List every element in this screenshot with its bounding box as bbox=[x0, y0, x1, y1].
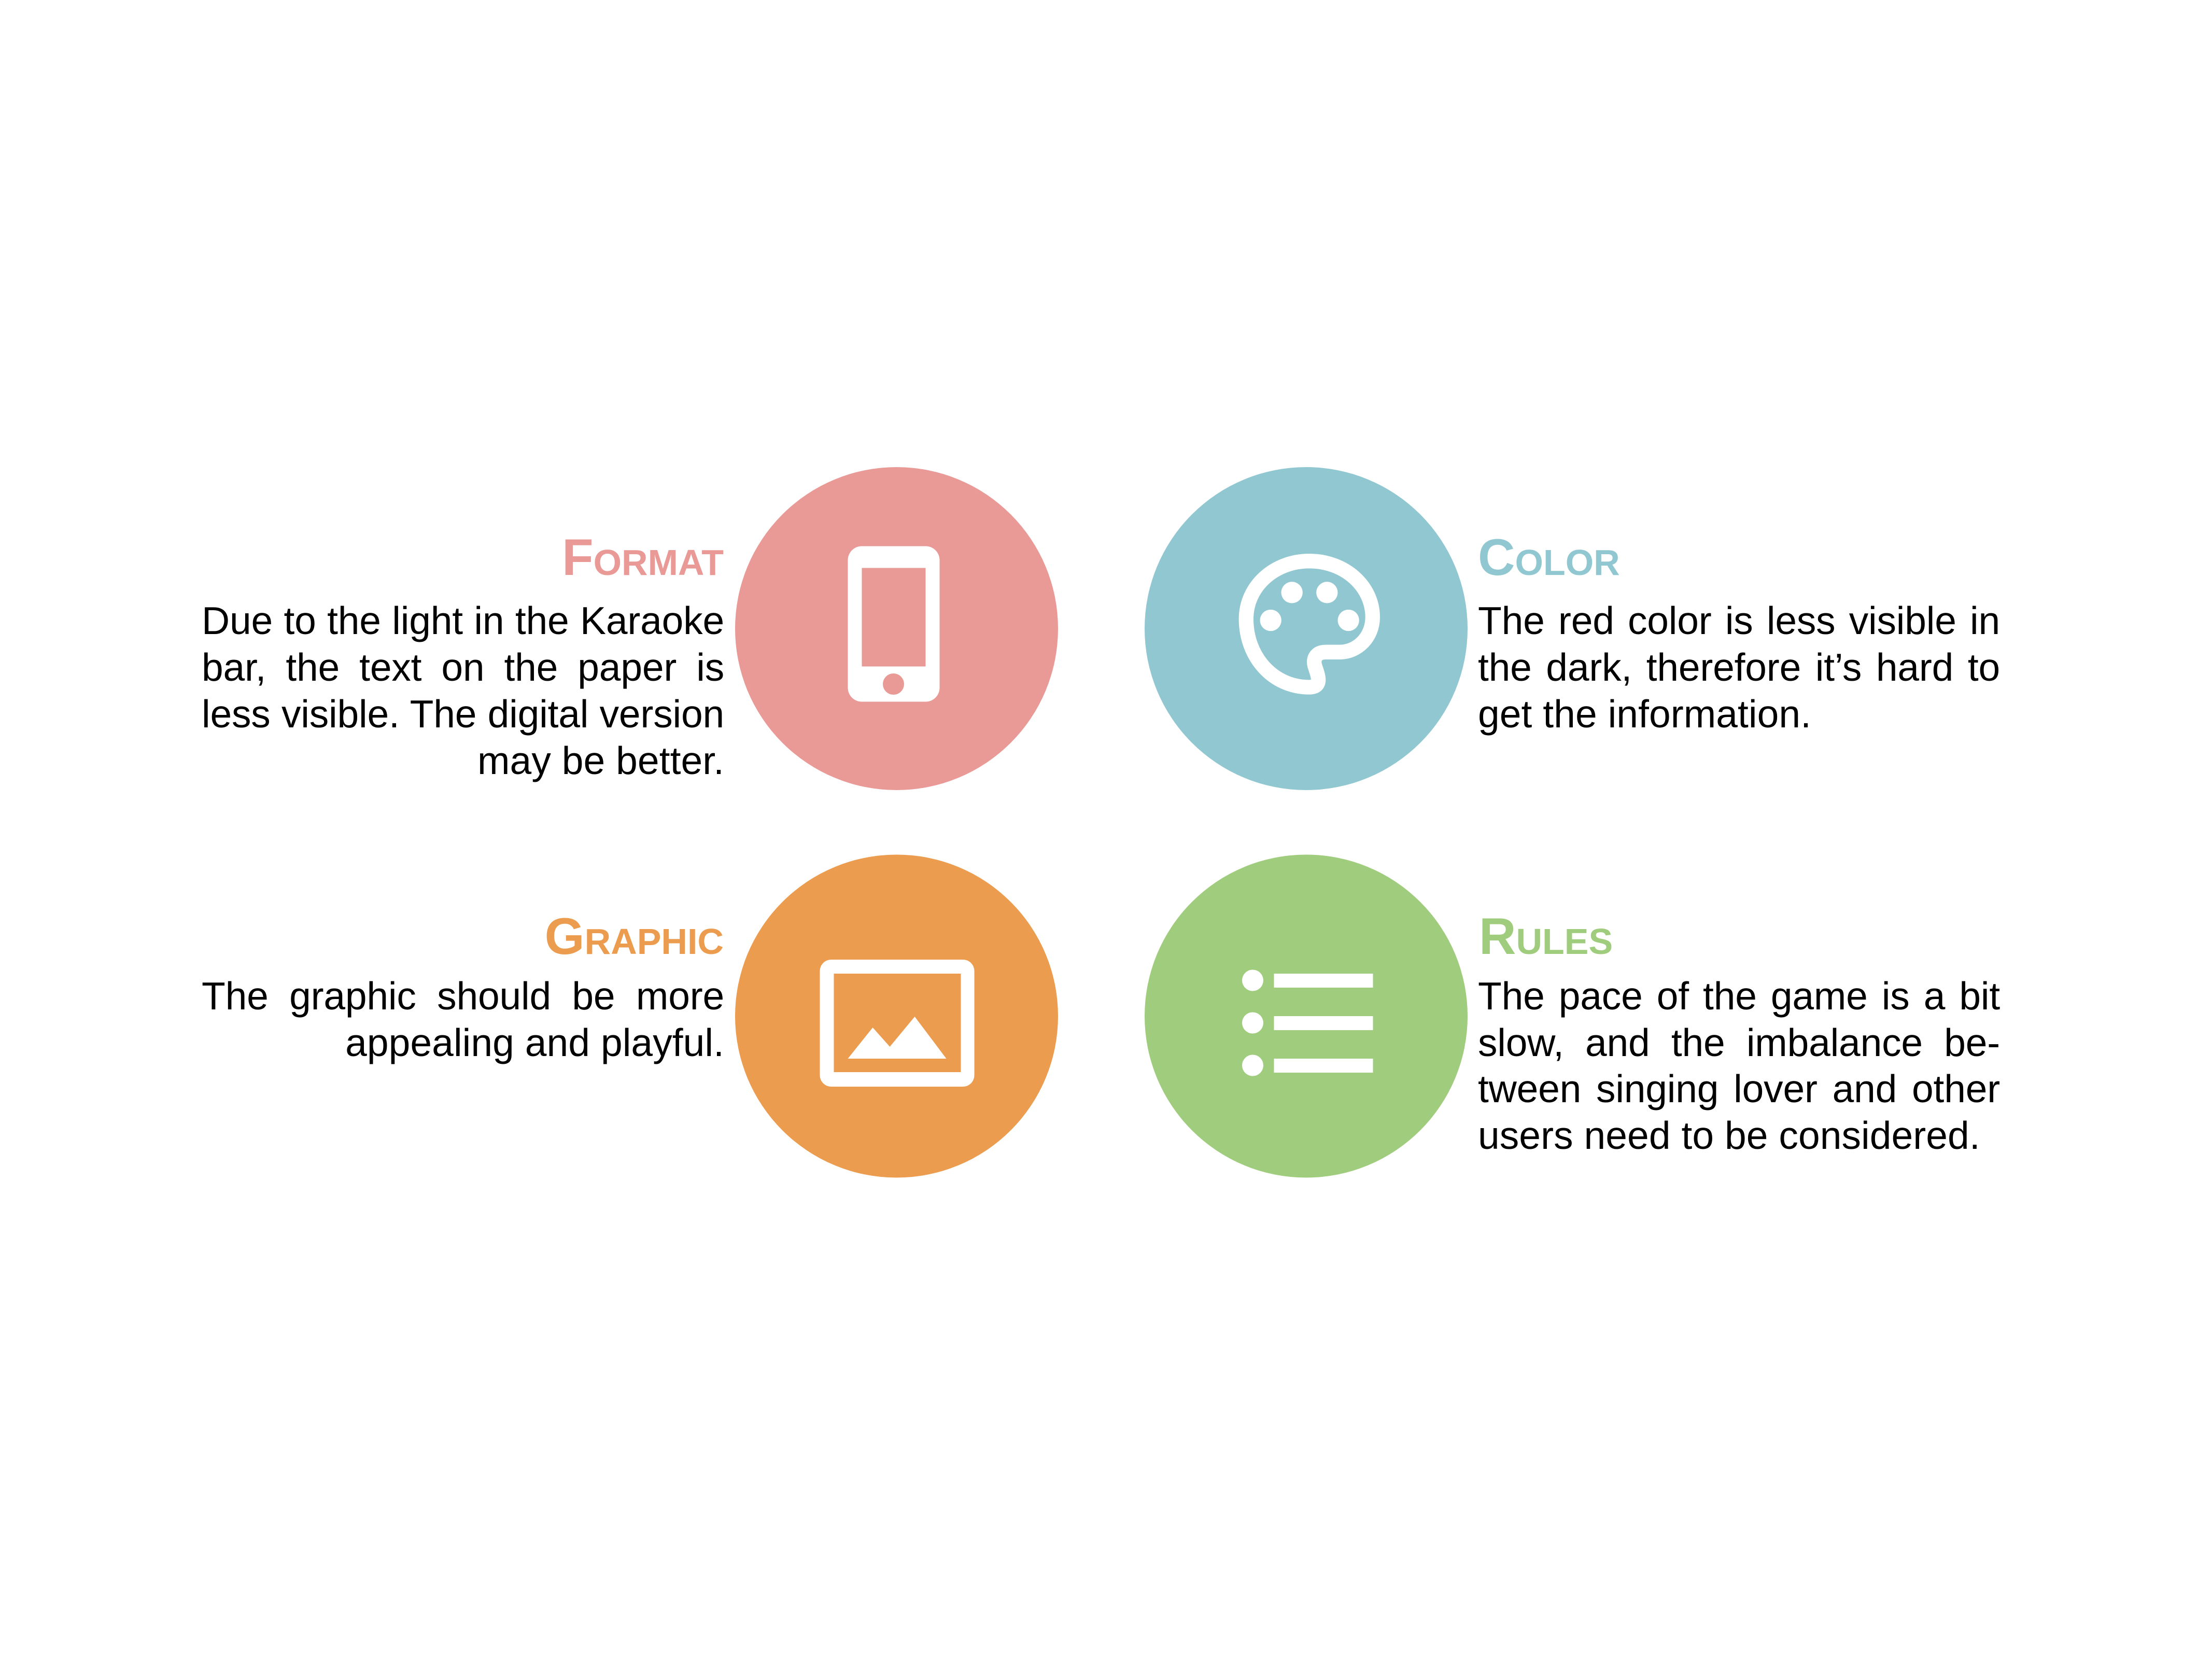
text: color description: get the information. bbox=[1478, 692, 1811, 736]
panel: graphic bbox=[202, 854, 1058, 1178]
text: rules description: users need to be considered. bbox=[1478, 1114, 1980, 1157]
text: graphic description: appealing and playful. bbox=[345, 1021, 724, 1064]
text: color description bbox=[1478, 599, 2000, 736]
text: graphic description bbox=[202, 974, 724, 1064]
text: rules description: The pace of the game is a bit bbox=[1478, 974, 2000, 1018]
heading: rules: RULES bbox=[1479, 907, 1613, 965]
text: color description: The red color is less visible in bbox=[1478, 599, 2000, 642]
text: format description: may be better. bbox=[477, 739, 724, 782]
text: format description: less visible. The digital version bbox=[202, 692, 724, 736]
text: color description: the dark, therefore it’s hard to bbox=[1478, 645, 2000, 689]
text: format description bbox=[202, 599, 724, 782]
text: graphic description: The graphic should be more bbox=[202, 974, 724, 1018]
text: format description: Due to the light in the Karaoke bbox=[202, 599, 724, 642]
text: rules description bbox=[1478, 973, 2000, 1159]
panel: color bbox=[1145, 467, 2000, 790]
icon: list in green circle bbox=[1145, 854, 1467, 1178]
heading: format: FORMAT bbox=[562, 528, 724, 586]
heading: graphic: GRAPHIC bbox=[545, 907, 724, 965]
icon: phone in pink circle bbox=[735, 467, 1058, 790]
icon: palette in teal circle bbox=[1145, 467, 1468, 790]
heading: color: COLOR bbox=[1478, 528, 1620, 586]
text: rules description: tween singing lover and other bbox=[1478, 1067, 2000, 1110]
text: format description: bar, the text on the paper is bbox=[202, 645, 724, 689]
icon: picture frame in orange circle bbox=[735, 854, 1058, 1178]
panel: format bbox=[202, 467, 1058, 790]
panel: rules bbox=[1145, 854, 2000, 1178]
text: rules description: slow, and the imbalance be- bbox=[1478, 1021, 2000, 1064]
